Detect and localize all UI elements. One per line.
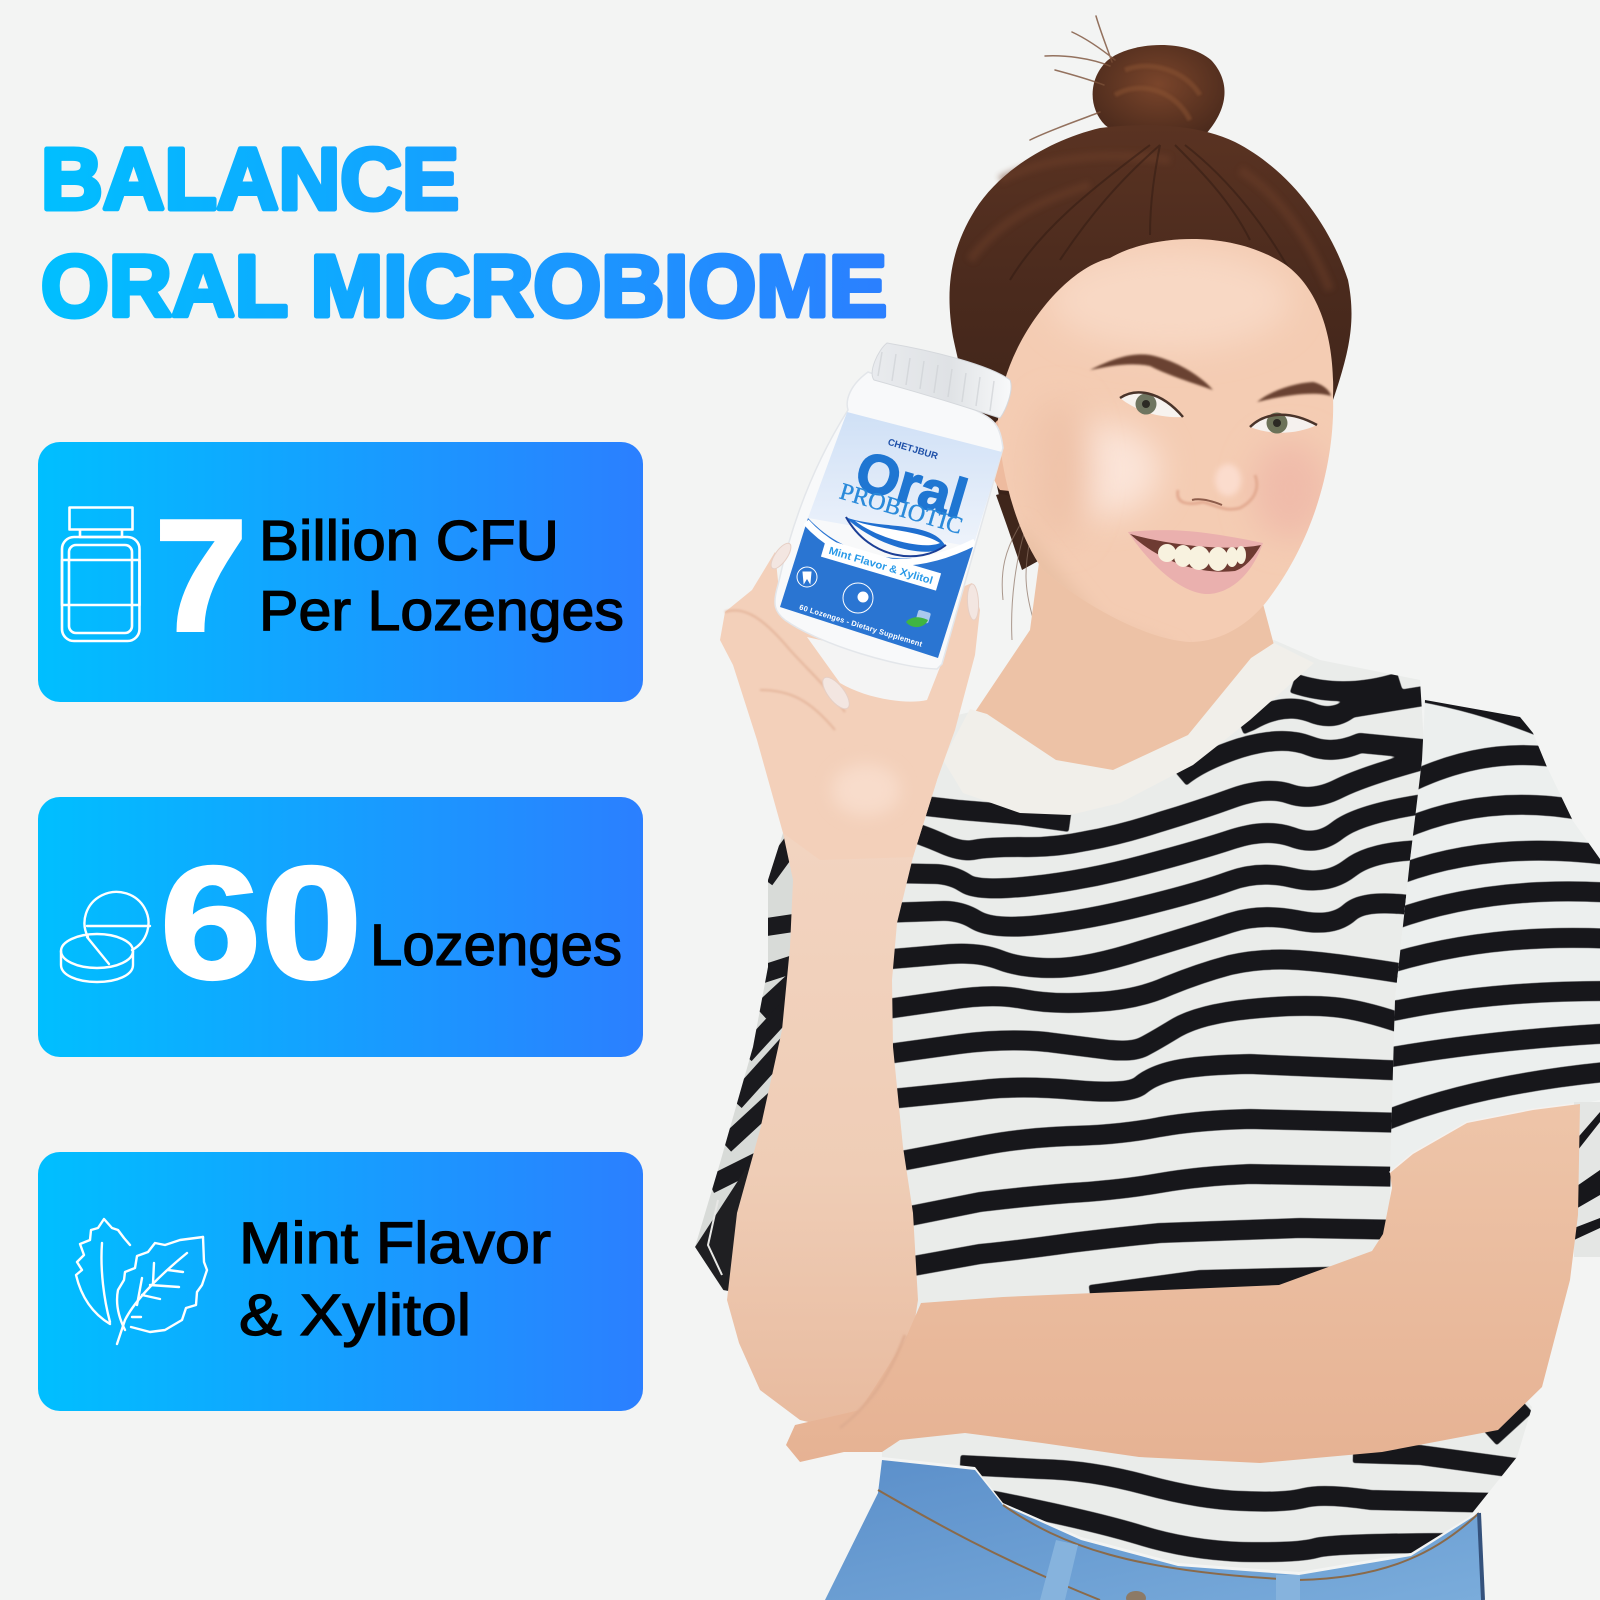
panel: 60 lozenges (38, 797, 643, 1057)
inner sleeve behind arm (1574, 1102, 1600, 1257)
panel: 7 billion CFU (38, 442, 643, 702)
product name probiotic: PROBIOTIC (837, 479, 965, 540)
hand (720, 552, 980, 860)
text: billion CFU per lozenges (259, 509, 624, 643)
jeans (825, 1460, 1483, 1600)
text: billion CFU per lozenges: Per Lozenges (259, 579, 624, 643)
icon: mint leaves (76, 1219, 207, 1344)
t-shirt torso (880, 640, 1532, 1572)
left sleeve (695, 834, 793, 1291)
elbow shading (840, 1335, 905, 1428)
bottle body (775, 372, 1003, 669)
eyebrows (1090, 354, 1331, 402)
product name oral: Oral (849, 438, 974, 530)
bottle label blue band (780, 518, 973, 658)
ear (988, 420, 1020, 492)
big number 60: 60 (160, 833, 362, 1012)
smile graphic (845, 517, 946, 556)
nose (1178, 464, 1257, 509)
shirt collar (943, 643, 1314, 815)
mouth (1128, 530, 1263, 594)
heading: balance oral microbiome: BALANCE (41, 131, 459, 228)
face (998, 239, 1333, 650)
flavor tag: Mint Flavor & Xylitol (827, 545, 934, 587)
label icons (797, 567, 873, 613)
black stripes on torso (880, 682, 1530, 1552)
photo: woman holding bottle (680, 16, 1600, 1600)
hair bun (1030, 16, 1225, 143)
bottle cap (872, 343, 1011, 418)
icon: lozenge tablets (61, 892, 150, 982)
hair (949, 125, 1352, 640)
heading: balance oral microbiome (41, 131, 887, 335)
text: mint flavor and xylitol: Mint Flavor (239, 1211, 551, 1276)
bottom label text: 60 Lozenges - Dietary Supplement (798, 603, 924, 649)
text: mint flavor and xylitol (239, 1211, 551, 1348)
forearm (786, 1104, 1580, 1463)
eye left (1120, 392, 1183, 417)
bottle base (807, 637, 940, 702)
mint leaf on label (906, 610, 931, 627)
heading: balance oral microbiome: ORAL MICROBIOME (41, 238, 887, 335)
big number 7: 7 (155, 488, 247, 664)
right sleeve (1389, 700, 1600, 1174)
text: lozenges: Lozenges (370, 913, 622, 978)
face shading (1019, 239, 1326, 596)
text: billion CFU per lozenges: Billion CFU (259, 509, 559, 573)
raised arm (727, 780, 937, 1432)
neck (975, 555, 1274, 790)
icon: bottle (62, 508, 140, 641)
bottle label top (808, 412, 1002, 547)
panel: mint flavor and xylitol (38, 1152, 643, 1411)
brand name: CHETJBUR (886, 437, 939, 462)
eye right (1250, 412, 1317, 434)
flavor tag (821, 539, 941, 591)
finger nails (767, 540, 979, 713)
bottle (775, 343, 1011, 702)
text: mint flavor and xylitol: & Xylitol (239, 1283, 471, 1348)
